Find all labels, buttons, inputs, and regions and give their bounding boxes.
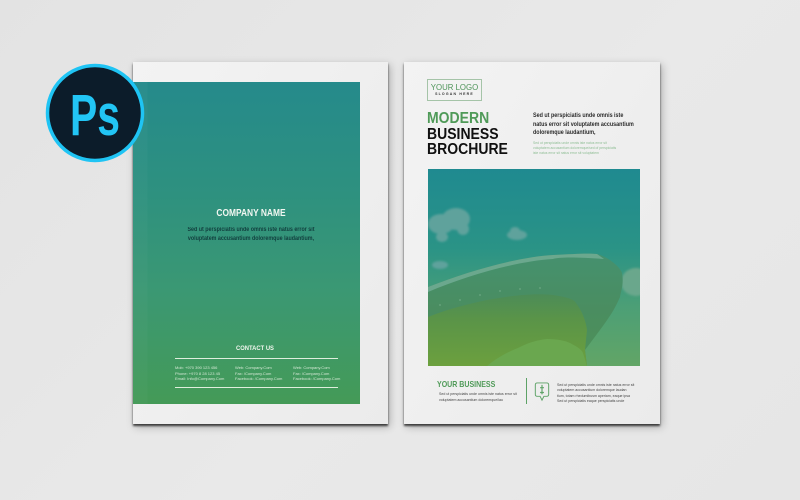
- contact column 2: Facebook: /Company.Com: [235, 376, 282, 381]
- company tagline: [187, 227, 314, 242]
- contact column 2: Fax: /Company.Com: [235, 370, 271, 376]
- icon: speech bubble with tower: [534, 382, 550, 402]
- small green text: [533, 141, 616, 155]
- Ps letters: Ps: [70, 83, 120, 148]
- logo text: YOUR LOGO: [431, 82, 478, 92]
- intro text: natus error sit voluptatem accusantium: [533, 121, 634, 128]
- company name: COMPANY NAME: [216, 208, 286, 219]
- contact column 2: [235, 365, 282, 381]
- panel: left brochure back cover: [133, 62, 388, 424]
- panel: green gradient cover: [133, 82, 360, 404]
- logo box: [427, 79, 482, 101]
- company tagline: Sed ut perspiciatis unde omnis iste natus error sit: [187, 227, 314, 233]
- contact column 3: Fax: /Company.Com: [293, 370, 329, 376]
- intro text: doloremque laudantium,: [533, 129, 596, 136]
- logo slogan: SLOGAN HERE: [435, 92, 474, 96]
- contact column 1: Email: Info@Company.Com: [175, 376, 224, 381]
- business text: Sed ut perspiciatis unde omnis iste natus error sit: [439, 391, 517, 396]
- company tagline: voluptatem accusantium doloremque laudantium,: [188, 236, 314, 242]
- clouds: [428, 208, 651, 296]
- contact column 3: [293, 365, 340, 381]
- intro text: Sed ut perspiciatis unde omnis iste: [533, 112, 623, 119]
- contact column 3: Facebook: /Company.Com: [293, 376, 340, 381]
- contact column 1: [175, 365, 224, 381]
- title: BUSINESS: [427, 126, 499, 143]
- small green text: Sed ut perspiciatis unde omnis iste natus error sit: [533, 141, 607, 145]
- business text: [439, 391, 517, 402]
- title: MODERN: [427, 110, 489, 127]
- cover photo with green overlay: [428, 169, 640, 366]
- contact column 2: Web: Company.Com: [235, 365, 272, 370]
- contact heading: CONTACT US: [236, 345, 274, 352]
- right description text: Sed ut perspiciatis eaque perspiciatis unde: [557, 398, 624, 403]
- title: [427, 110, 508, 158]
- title: BROCHURE: [427, 141, 508, 158]
- right description text: Sed ut perspiciatis unde omnis iste natus error sit: [557, 382, 634, 387]
- business heading: YOUR BUSINESS: [437, 380, 495, 389]
- intro text: [533, 112, 634, 136]
- contact column 1: Mob: +970 390 123 456: [175, 365, 217, 370]
- right description text: tium, totam rhedumibusm aperiam, eaque ipsa: [557, 393, 630, 398]
- building roof: [428, 254, 623, 366]
- right description text: [557, 382, 634, 403]
- right description text: voluptatem accusantium doloremque laudan: [557, 387, 626, 392]
- vertical divider: [526, 378, 527, 404]
- small green text: voluptatem accusantium doloremque/sed of perspiciatis: [533, 146, 616, 150]
- contact column 3: Web: Company.Com: [293, 365, 330, 370]
- panel: right brochure front cover: [404, 62, 660, 424]
- icon: Photoshop logo: [46, 64, 144, 162]
- business text: voluptatem accusantium doloremque/lau: [439, 396, 503, 402]
- contact column 1: Phone: +970 8 28 123 45: [175, 370, 220, 376]
- small green text: iste natus error sit natus error sit voluptatem: [533, 151, 599, 155]
- contact block: [175, 358, 338, 388]
